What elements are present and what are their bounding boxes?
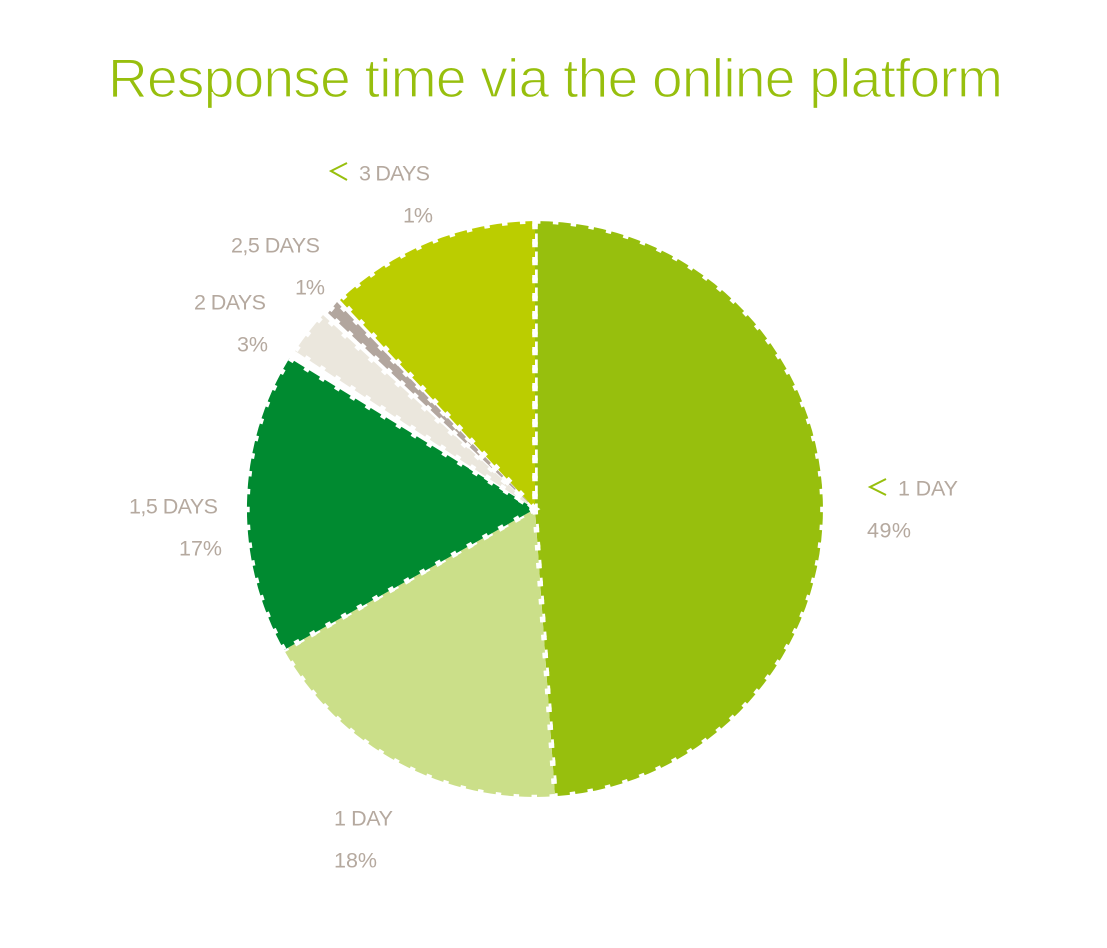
label: under 1 day: [867, 476, 958, 542]
icon: less-than sign: [331, 163, 347, 180]
label: under 3 days: [331, 162, 433, 228]
slice: under 1 day, 49%: [535, 221, 823, 796]
title: Response time via the online platform: [108, 47, 1003, 109]
label: under 1 day: 1 DAY: [898, 476, 958, 500]
slice: 1,5 days, 17%: [247, 358, 535, 650]
label: 2 days: 3%: [237, 332, 268, 356]
label: 2,5 days: 1%: [295, 276, 325, 300]
slice: 2,5 days, 1%: [328, 302, 535, 509]
label: 1,5 days: 1,5 DAYS: [129, 494, 218, 518]
label: 2,5 days: [231, 234, 325, 300]
label: under 1 day: 49%: [867, 518, 911, 542]
label: 1,5 days: 17%: [179, 536, 222, 560]
label: under 3 days: 1%: [403, 204, 433, 228]
label: 2 days: [194, 290, 268, 356]
label: 1 day: [334, 806, 393, 872]
pie chart: [247, 221, 823, 797]
label: 2,5 days: 2,5 DAYS: [231, 234, 320, 258]
label: 2 days: 2 DAYS: [194, 290, 266, 314]
slice: 2 days, 3%: [295, 315, 535, 509]
label: 1 day: 18%: [334, 848, 377, 872]
label: 1,5 days: [129, 494, 222, 560]
slice: under 3 days, 1%: [340, 221, 535, 509]
label: under 3 days: 3 DAYS: [359, 162, 430, 186]
icon: less-than sign: [870, 479, 886, 495]
label: 1 day: 1 DAY: [334, 806, 393, 830]
slice: 1 day, 18%: [284, 509, 555, 797]
dashed divider between slices: [535, 221, 555, 796]
